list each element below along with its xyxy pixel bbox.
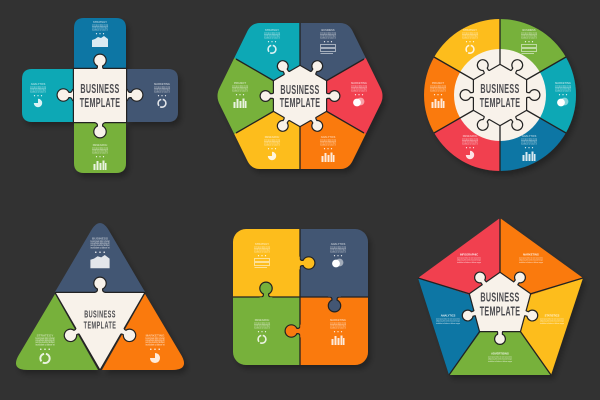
- circle widget: yellow: [462, 28, 478, 53]
- triangle title: BUSINESS: [84, 309, 116, 320]
- circle segments: [424, 19, 576, 171]
- pentagon title: BUSINESS: [480, 292, 520, 305]
- pentagon text: analytics: Lorem ipsum dolor sit amet consectetur: [436, 318, 460, 320]
- hexagon widget: slate: [320, 28, 336, 54]
- pentagon text: analytics: [436, 314, 461, 325]
- square widget: green: RESEARCH: [255, 318, 269, 322]
- circle title: [480, 83, 520, 111]
- circle widget: orange: [430, 81, 446, 108]
- cross centre piece: [58, 55, 142, 137]
- hexagon widget: red: [351, 81, 367, 106]
- triangle title: [84, 309, 116, 331]
- pentagon title: TEMPLATE: [480, 306, 520, 319]
- circle inner disc: [454, 49, 546, 141]
- pentagon text: marketing: Lorem ipsum dolor sit amet consectetur: [519, 256, 543, 260]
- triangle widget: left: [35, 333, 55, 363]
- square widget: yellow: STRATEGY: [255, 242, 269, 246]
- pentagon text: infographic: incididunt ut labore et dolore magna: [457, 261, 482, 264]
- knob: orange into green: [286, 325, 303, 337]
- pentagon text: statistics: Lorem ipsum dolor sit amet consectetur: [540, 318, 564, 320]
- circle widget: red: [462, 134, 478, 159]
- panel: cross puzzle: [22, 18, 178, 173]
- triangle widget: top: BUSINESS: [92, 236, 108, 240]
- triangle widget: right: [145, 333, 165, 363]
- triangle segments: [16, 223, 184, 370]
- hexagon widget: yellow: RESEARCH: [265, 135, 279, 139]
- square widget: orange: MARKETING: [330, 318, 346, 322]
- panel: square puzzle: [233, 229, 368, 365]
- triangle widget: right: MARKETING: [146, 333, 165, 337]
- hexagon title: [280, 84, 320, 111]
- pentagon text: infographic: Lorem ipsum dolor sit amet consectetur: [457, 256, 481, 260]
- triangle widget: top: [90, 236, 110, 268]
- panel: triangle puzzle: [16, 223, 184, 370]
- pentagon text: analytics: adipiscing elit sed do eiusmod tempor: [436, 320, 460, 323]
- square segments: [233, 229, 368, 365]
- hexagon title: BUSINESS: [280, 84, 320, 98]
- circle widget: blue: [521, 134, 537, 161]
- pentagon text: analytics: incididunt ut labore et dolore magna: [436, 322, 461, 325]
- knob: yellow into slate: [297, 257, 314, 269]
- circle title: TEMPLATE: [480, 97, 520, 111]
- pentagon text: marketing: adipiscing elit sed do eiusmod tempor: [519, 259, 543, 262]
- pentagon text: advertising: adipiscing elit sed do eiusmod tempor: [488, 358, 512, 361]
- triangle title: TEMPLATE: [84, 320, 116, 331]
- cross widget: top: [92, 20, 108, 47]
- pentagon text: analytics: ANALYTICS: [441, 314, 456, 318]
- cross title: TEMPLATE: [80, 97, 120, 111]
- hexagon widget: teal: [264, 28, 280, 53]
- pentagon text: statistics: STATISTICS: [545, 314, 560, 318]
- pentagon text: statistics: adipiscing elit sed do eiusmod tempor: [540, 320, 564, 323]
- panel: hexagon puzzle: [218, 23, 385, 172]
- hexagon title: TEMPLATE: [280, 97, 320, 111]
- pentagon text: infographic: [457, 252, 482, 264]
- pentagon text: advertising: ADVERTISING: [491, 352, 509, 356]
- knob: green into yellow: [260, 283, 272, 300]
- pentagon title: [480, 292, 520, 319]
- hexagon widget: orange: ANALYTICS: [321, 135, 336, 139]
- circle widget: blue: ANALYTICS: [522, 134, 537, 138]
- cross widget: right: MARKETING: [154, 82, 170, 86]
- triangle centre piece: [56, 278, 144, 369]
- hexagon widget: teal: STRATEGY: [265, 28, 279, 32]
- square widget: slate: ANALYTICS: [331, 242, 346, 246]
- cross arms: [22, 18, 178, 173]
- panel: pentagon puzzle: [418, 218, 583, 375]
- hexagon widget: green: [232, 81, 248, 108]
- cross widget: left: ANALYTICS: [31, 82, 46, 86]
- cross widget: bottom: RESEARCH: [93, 143, 107, 147]
- hexagon centre piece: [261, 60, 339, 132]
- pentagon text: marketing: MARKETING: [523, 252, 539, 256]
- hexagon widget: red: MARKETING: [351, 81, 367, 85]
- hexagon widget: orange: [320, 135, 336, 162]
- circle widget: teal: [555, 81, 571, 106]
- pentagon text: marketing: incididunt ut labore et dolore magna: [519, 261, 544, 264]
- hexagon segments: [218, 23, 385, 172]
- pentagon text: marketing: [519, 252, 544, 264]
- circle widget: teal: MARKETING: [555, 81, 571, 85]
- pentagon text: statistics: [540, 314, 565, 325]
- pentagon text: infographic: adipiscing elit sed do eiusmod tempor: [457, 259, 481, 262]
- circle widget: orange: PROJECT: [432, 81, 445, 85]
- pentagon text: advertising: incididunt ut labore et dolore magna: [488, 360, 513, 363]
- cross title: [80, 83, 120, 111]
- circle title: BUSINESS: [480, 83, 520, 97]
- knob: slate into orange: [328, 294, 341, 311]
- triangle widget: left: STRATEGY: [37, 333, 54, 337]
- circle centre piece: [461, 59, 539, 131]
- pentagon text: advertising: Lorem ipsum dolor sit amet consectetur: [488, 356, 512, 358]
- hexagon widget: slate: BUSINESS: [321, 28, 335, 32]
- hexagon widget: green: PROJECT: [234, 81, 247, 85]
- hexagon widget: yellow: [264, 135, 280, 160]
- cross widget: bottom: [92, 143, 108, 170]
- cross widget: left: [30, 82, 46, 107]
- pentagon segments: [418, 218, 583, 375]
- cross title: BUSINESS: [80, 83, 120, 97]
- pentagon text: infographic: INFOGRAPHIC: [460, 252, 478, 256]
- circle widget: red: RESEARCH: [463, 134, 477, 138]
- panel: circle puzzle: [424, 19, 576, 171]
- cross widget: right: [154, 82, 170, 107]
- pentagon centre piece: [462, 271, 538, 344]
- circle widget: yellow: STRATEGY: [463, 28, 477, 32]
- circle widget: green: BUSINESS: [522, 28, 536, 32]
- pentagon text: advertising: [488, 352, 513, 363]
- pentagon text: statistics: incididunt ut labore et dolore magna: [540, 322, 565, 325]
- circle widget: green: [521, 28, 537, 54]
- cross widget: top: STRATEGY: [93, 20, 107, 24]
